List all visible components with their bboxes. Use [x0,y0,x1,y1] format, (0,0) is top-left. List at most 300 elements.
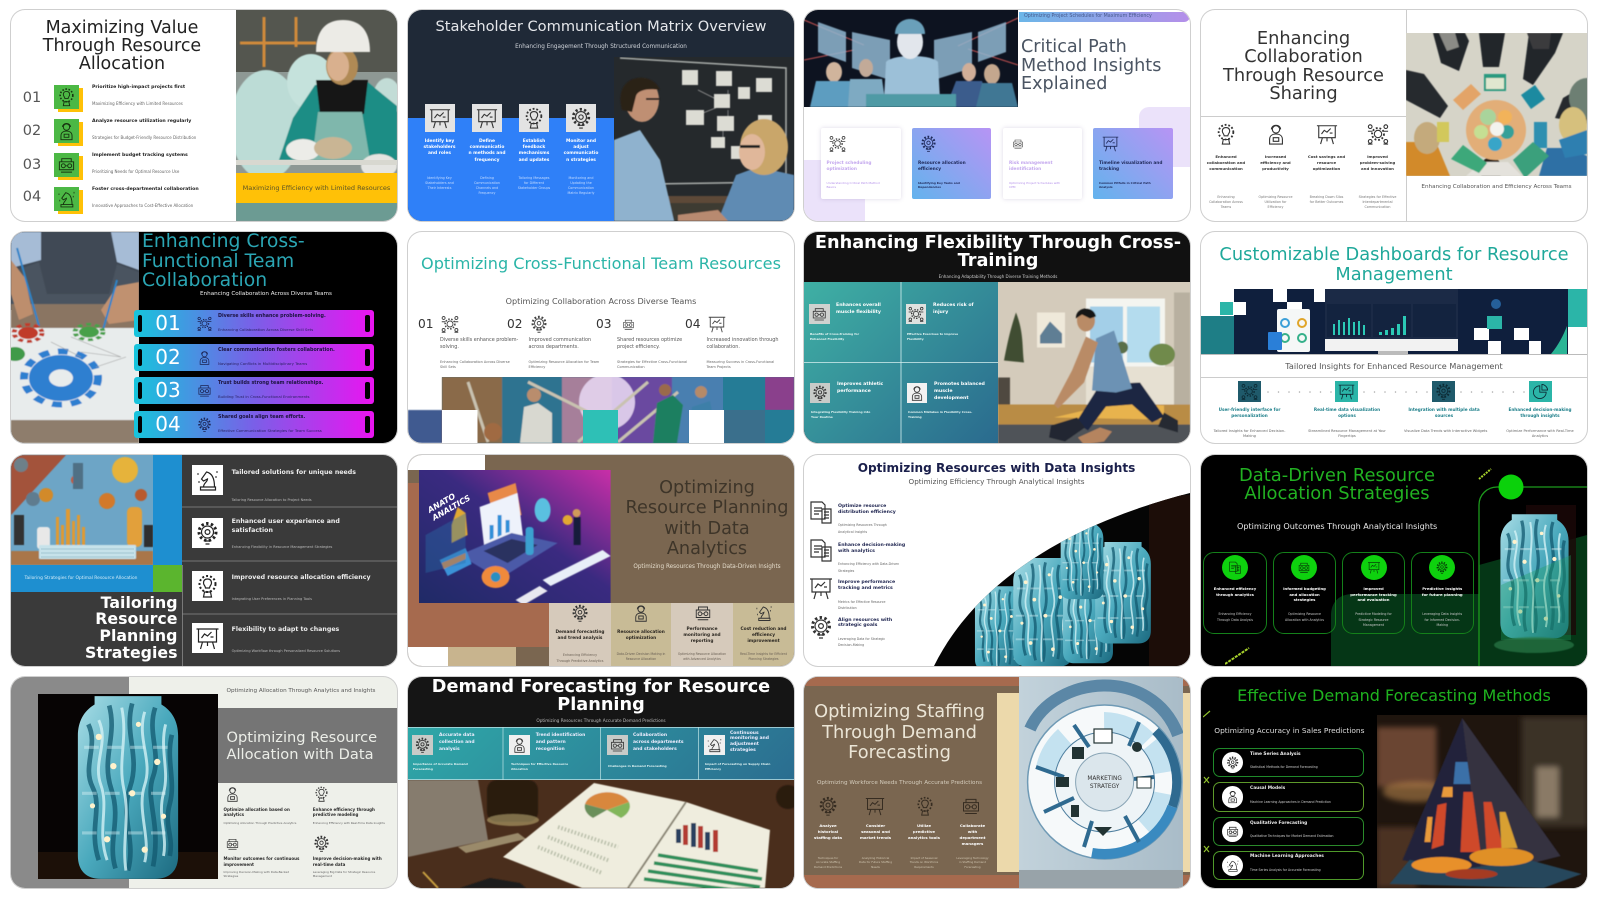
card 3 text: CPM [1009,185,1016,189]
cell 4 heading: muscle [934,389,953,394]
item 3 text: Integrating User Preferences in Planning Tools [232,597,312,601]
photo: desk with data objects [11,455,153,565]
column 4 heading: managers [962,841,983,846]
title: Stakeholder Communication Matrix Overview [436,18,766,35]
curved photo: glass jars [934,493,1190,666]
column 3 heading [1404,407,1484,420]
column 1 text: Teams [1221,205,1231,209]
item 1 heading [224,807,290,817]
item 1 text: Tailoring Resource Allocation to Project Needs [232,498,312,502]
item 4 subtext: Measuring Success in Cross-Functional [706,360,774,364]
blue caption band [11,565,153,592]
item 4 text: Management [313,874,332,878]
column panel 3 [671,603,733,666]
title [620,478,794,560]
title [42,18,201,74]
vertical divider [1406,10,1407,221]
card 1 heading: optimization [826,167,857,172]
column 1 heading [804,823,852,841]
column 4 heading: n strategies [566,158,596,163]
icon 1 [424,104,454,132]
title: Training [958,251,1038,271]
item 4 heading [838,618,892,629]
method box 3 [1213,817,1364,846]
column 2 heading: seasonal and [861,829,890,834]
column 2 heading: market trends [860,835,891,840]
number 01: 01 [23,90,41,106]
item 1 subtext: Skill Sets [440,365,456,369]
icon 1 [224,786,241,802]
item 1 heading: analytics [224,812,244,817]
box 4 text: Leveraging Data Insights [1422,612,1462,616]
icon 3 [224,837,241,851]
cell 1 text [810,332,859,341]
item 1 heading: Optimize allocation based on [224,807,290,812]
item 2 text: Navigating Conflicts in Multidisciplinary Teams [218,361,307,366]
cell 1 text: Enhanced Flexibility [810,337,844,341]
column 3 heading [671,627,733,645]
white corner block [408,455,484,470]
box 4 [1411,552,1474,634]
item 3 heading: Trust builds strong team relationships. [218,381,323,386]
subtitle: Optimizing Accuracy in Sales Predictions [1214,726,1364,735]
feature card 2 [912,128,991,199]
icon circle 1 [1222,752,1243,773]
number 02: 02 [23,123,41,139]
icon tile 1 [54,85,79,109]
yellow caption band: Maximizing Efficiency with Limited Resources [243,184,390,192]
item 1 text: Enhancing Collaboration Across Diverse Skill Sets [218,327,313,332]
column 4 heading: Continuous [730,730,759,736]
column 1 text: Identifying Key [427,176,452,180]
cell 2 heading: Reduces risk of [933,303,974,308]
icon circle 1 [1222,554,1248,580]
column 3 heading: analytics tools [908,835,940,840]
title: Allocation with Data [226,746,374,763]
method 1 text: Statistical Methods for Demand Forecasting [1250,765,1318,769]
column 1 text: Collaboration Across [1209,200,1243,204]
icon 4 [1102,136,1118,152]
column 3 heading: predictive [913,829,935,834]
column 3 text: Challenges in Demand Forecasting [608,764,667,768]
panel: Critical Path Method Insights Explained [804,10,1190,221]
box 1 text: Enhancing Efficiency [1218,612,1252,616]
title: Collaboration [142,270,267,291]
item 4 text: Optimizing Workflow through Personalized Resource Solutions [232,649,340,653]
item 3 heading: tracking and metrics [838,586,893,591]
title: Management [1335,264,1453,285]
panel: Maximizing Value Through Resource Allocation [11,10,397,221]
column 2 text [1258,194,1293,209]
method box 2 [1213,782,1364,812]
subtitle: Enhancing Adaptability Through Diverse Training Methods [939,274,1057,279]
card 3 heading [1009,160,1053,172]
column 3 text: Impact of Seasonal [911,856,937,860]
icon tile 4 [54,187,79,211]
column 3 text [900,856,948,870]
top subtitle: Optimizing Allocation Through Analytics and Insights [226,688,376,694]
decorative ticks [1203,709,1211,854]
column 2 heading: n methods and [469,151,505,156]
cell 3 text [811,410,870,419]
column 3 text: for Different [524,181,544,185]
column 2 heading: options [1338,413,1356,418]
banner [1019,12,1190,22]
item 3 subtext [617,360,687,370]
column 1 heading: Demand forecasting [555,630,604,635]
column 2 heading [852,823,900,841]
panel: Optimizing Resource Planning with Data Analytics [408,455,794,666]
column 1 heading: collection and [439,740,475,745]
column 2 heading: Define [479,139,495,144]
column 2 text: Analyzing Historical [862,856,889,860]
cell 3 text: Your Routine [811,415,833,419]
item 4 text [313,870,375,879]
item 2 text: Enhancing Efficiency with Data-Driven [838,562,899,566]
card 3 heading: Risk management [1009,161,1053,166]
box 2 text [1273,612,1336,623]
column 3 heading: sources [1435,413,1453,418]
column 3 text: Trends on Workforce [910,860,938,864]
column 1 text [549,652,611,664]
card 3 heading: identification [1009,167,1041,172]
panel: Demand Forecasting for Resource Planning [408,677,794,888]
column 4 text: Leveraging Technology [956,856,989,860]
card 4 text: Common Pitfalls in Critical Path [1099,181,1151,185]
column 4 text: Impact of Forecasting on Supply Chain [705,762,770,766]
column 1 text: Techniques for [818,856,838,860]
column 1 text [1209,194,1243,209]
box 4 text: Making [1436,623,1448,627]
icon 4 [961,796,981,816]
bar 4 [134,411,374,438]
item 4 heading: Foster cross-departmental collaboration [92,187,199,192]
column 1 heading [1210,407,1290,420]
icon 2 [1269,124,1283,145]
item 1 subtext: Enhancing Collaboration Across Diverse [440,360,510,364]
feature card 3 [1003,128,1082,199]
box 2 text: Allocation with Analytics [1285,618,1324,622]
column 4 heading: communicatio [564,151,598,156]
column 3 heading: feedback [523,145,545,150]
icon 1 [441,315,459,333]
bar 2 [134,344,374,371]
title: Allocation [79,54,165,74]
column 4 heading: strategies [730,748,756,753]
column 4 heading: adjustment [730,742,759,747]
column 4 text [1358,194,1396,209]
title: Functional Team [142,250,294,272]
column 2 text [611,652,671,662]
column 3 heading: and stakeholders [633,747,677,752]
item 1 heading: Tailored solutions for unique needs [232,469,356,476]
column 4 text [568,176,594,195]
column 1 text [413,762,468,772]
column 4 text [733,652,794,662]
item 2 text: Enhancing Flexibility in Resource Management Strategies [232,544,332,548]
column 2 heading: productivity [1262,166,1289,171]
icon 2 [192,518,223,548]
column 2 text: Data for Future Staffing [859,860,892,864]
cell 2 heading [933,302,974,316]
number 02: 02 [507,317,523,331]
box 1 text [1203,612,1267,623]
title: Method Insights [1021,56,1161,76]
cell 4 text: Common Mistakes in Flexibility Cross- [908,410,972,414]
item 3 text: Building Trust in Cross-Functional Environments [218,394,310,399]
column 4 heading: and innovation [1361,166,1394,171]
item 2 heading: with analytics [838,549,875,554]
column 2 heading: frequency [475,158,499,163]
panel: Optimizing Cross-Functional Team Resources [408,232,794,443]
icon 2 [197,350,212,365]
photo: data pyramid in dim interior [1376,715,1587,888]
icon 2 [921,136,936,152]
illustration: analytics laptop: ANATO [426,492,458,515]
item 2 heading: Analyze resource utilization regularly [92,119,191,124]
column 3 text: with Advanced Analytics [683,656,721,660]
box 1 [1203,552,1267,634]
item 2 subtext [528,360,599,370]
icon 4 [566,104,596,132]
column 2 text [852,856,900,870]
panel: Customizable Dashboards for Resource Management [1201,232,1587,443]
column 4 heading: through insights [1520,413,1560,418]
item 3 text: Strategies [224,874,238,878]
title [85,595,178,662]
blue lower block [408,118,614,221]
method 4 text: Time Series Analysis for Accurate Forecasting [1250,868,1321,872]
title: Effective Demand Forecasting Methods [1237,686,1551,705]
icon 1 [830,136,846,152]
icon 4 [755,604,773,622]
blue caption band: Tailoring Strategies for Optimal Resource Allocation [24,576,137,581]
image: dashboard monitor mosaic [1201,289,1587,354]
column 3 text [518,176,550,190]
column 3 heading [518,138,550,163]
column 4 text: Optimize Performance with Real-Time [1506,428,1574,432]
bar end slots [134,310,374,438]
photo: two colleagues at a chalkboard [614,57,794,221]
column 1 heading: staffing data [814,835,842,840]
item 3 text: Distribution [838,606,857,610]
icon 3 [915,796,935,816]
item 3 text: Metrics for Effective Resource [838,600,886,604]
title: Forecasting [848,742,951,763]
column 4 text [948,856,996,870]
subtitle: Enhancing Collaboration Across Diverse Teams [200,291,332,297]
method box 4 [1213,851,1364,880]
number 01: 01 [418,317,434,331]
column 1 text: Importance of Accurate Demand [413,762,468,766]
panel: Effective Demand Forecasting Methods [1201,677,1587,888]
item 2 subtext: Optimizing Resource Allocation for Team [528,360,599,364]
illustration: analytics laptop: ANALTICS [430,493,473,523]
cell 4 text [908,410,972,419]
wheel diagram: marketing strategy [1019,677,1183,888]
column 2 text [511,762,568,772]
column 1 heading: Identify key [425,139,454,144]
column 1 text: Forecasting [413,767,433,771]
item 1 subtext [440,360,510,370]
column 3 text [671,652,733,662]
panel: Enhancing Flexibility Through Cross-Training [804,232,1190,443]
icon 4 [197,417,212,432]
subtitle: Tailored Insights for Enhanced Resource Management [1285,361,1503,371]
title: Planning [557,695,645,715]
column 2 text: Communication [474,181,500,185]
panel: Optimizing Staffing Through Demand Forecasting [804,677,1190,888]
cell 1 heading [836,302,881,316]
column 1 heading: analysis [439,747,460,752]
item 2 text: across departments. [528,344,579,350]
blue strip [153,455,182,565]
icon 3 [809,576,833,600]
box 2 [1273,552,1336,634]
decorative block right [1139,107,1190,167]
icon circle 4 [1429,554,1455,580]
box 2 heading: strategies [1294,597,1315,602]
icon 1 [412,735,433,755]
title: Tailoring [101,593,178,612]
item 3 text [224,870,289,879]
item 3 text: Shared resources optimize [617,336,682,342]
item 1 heading: Prioritize high-impact projects first [92,85,185,90]
column 1 heading [1206,154,1245,171]
title: Maximizing Value [46,18,198,38]
beige stripe [997,693,1020,872]
method 3 text: Qualitative Techniques for Market Demand Estimation [1250,834,1334,838]
column 1 heading: Enhanced [1215,154,1237,159]
item 2 heading: Enhanced user experience and [232,518,340,525]
icon 4 [907,383,927,403]
box 3 heading: and evaluation [1358,597,1389,602]
card 4 text: Analysis [1099,185,1113,189]
box 2 text: Optimizing Resource [1288,612,1321,616]
item 2 heading: satisfaction [232,527,273,534]
icon circle 3 [1222,821,1243,842]
subtitle: Optimizing Outcomes Through Analytical Insights [1237,521,1437,531]
icon 1 [1238,381,1261,402]
column 2 heading: Consider [866,823,885,828]
column 2 heading: Increased [1265,154,1286,159]
card 1 text: Understanding Critical Path Method [826,181,880,185]
subtitle: Optimizing Resources Through Accurate Demand Predictions [536,719,666,724]
panel: Enhancing Collaboration Through Resource Sharing [1201,10,1587,221]
icon 3 [1013,140,1023,149]
yellow caption band [236,173,397,203]
item 3 heading: improvement [224,862,254,867]
column 3 heading: Establish [523,139,545,144]
column 4 heading: Improved [1367,154,1388,159]
item 4 subtext [706,360,774,370]
rust bottom band [804,875,1190,888]
column 4 heading: problem-solving [1360,160,1395,165]
icon 2 [530,315,548,333]
item 4 heading: strategic goals [838,623,877,628]
item 4 text: Leveraging Data for Strategic [838,637,885,641]
item 3 text: Improving Decision-Making with Data-Backed [224,870,289,874]
item 1 text [838,522,887,536]
column 2 heading: Trend identification [536,733,585,738]
icon 3 [1432,381,1455,402]
title: Enhancing Flexibility Through Cross- [815,232,1181,252]
number 03: 03 [155,378,181,402]
panel: Optimizing Resource Allocation with Data [11,677,397,888]
card 1 text [826,181,880,189]
image mosaic: team on scaffolding [408,377,794,443]
cell 1 text: Benefits of Cross-Training for [810,332,859,336]
title: Resource [95,609,178,628]
column 1 text: Through Predictive Analytics [556,658,604,662]
column 2 heading: Real-time data visualization [1314,407,1380,412]
icon 4 [708,315,726,333]
column 1 heading: Accurate data [439,733,474,738]
icon 3 [519,104,549,132]
cell 4 heading: Promotes balanced [934,382,985,387]
photo: open report with charts [408,780,794,888]
box 3 text [1342,612,1405,629]
item 4 text: Effective Communication Strategies for Team Success [218,428,322,433]
cell 2 text [907,332,958,341]
column 3 heading: Cost savings and [1308,154,1345,159]
column 4 text: Strategies for Effective [1359,194,1396,198]
column 4 heading: monitoring and [730,736,769,741]
icon 4 [313,835,330,852]
column 1 heading: collaboration and [1207,160,1245,165]
title: Through Resource [43,36,201,56]
column 2 text: Techniques for Effective Resource [511,762,568,766]
card 2 text [918,181,960,189]
column 2 text: Frequency [478,191,496,195]
column 1 text: Stakeholders and [425,181,454,185]
item 3 heading: Improve performance [838,580,895,585]
bar 3 [134,377,374,404]
column 4 heading: efficiency [752,633,775,638]
title [1021,37,1161,94]
column 4 text: Interdepartmental [1362,200,1393,204]
column 3 text: Requirements [914,865,934,869]
item 3 subtext: Communication [617,365,645,369]
box 3 heading [1342,586,1405,603]
title [1237,467,1437,504]
photo: man stretching in a lunge [998,282,1190,444]
box 2 heading: Informed budgeting [1283,586,1326,591]
column 4 heading [564,138,598,163]
number 04: 04 [685,317,701,331]
box 4 heading: for future planning [1422,592,1463,597]
title: Strategies [85,643,178,662]
item 1 text: solving. [440,344,459,350]
column 1 heading: communication [1209,166,1243,171]
item 2 text: Strategies for Budget-Friendly Resource Distribution [92,135,196,140]
icon 4 [809,615,833,639]
subtitle: Optimizing Collaboration Across Diverse Teams [506,296,696,306]
horizontal rule [1201,377,1587,378]
item 2 text [838,561,899,575]
item 3 subtext: Strategies for Effective Cross-Functional [617,360,687,364]
method 3 heading: Qualitative Forecasting [1250,820,1307,826]
wheel diagram: marketing strategy: MARKETING [1087,776,1122,782]
icon 1 [197,316,212,331]
column 2 text: Optimizing Resource [1258,194,1293,198]
subtitle: Optimizing Efficiency Through Analytical Insights [909,477,1084,486]
column 4 text: Real-Time Insights for Efficient [740,652,787,656]
column 4 text: Planning Strategies [748,656,779,660]
column 3 text: Tailoring Messages [518,176,550,180]
box 1 heading: Enhanced efficiency [1214,586,1256,591]
title: Critical Path [1021,37,1127,57]
